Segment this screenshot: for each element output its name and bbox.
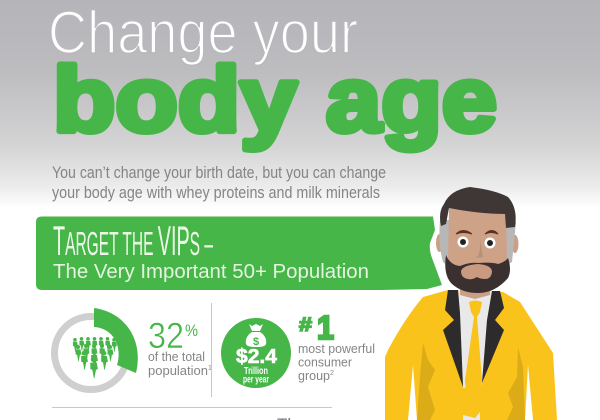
stat: 32% of the total population: % (185, 321, 198, 340)
face (448, 208, 507, 285)
intro text: your body age with whey proteins and milk minerals (52, 184, 380, 202)
vertical divider (210, 303, 212, 397)
title: body age: age (326, 49, 497, 151)
jacket shading (417, 343, 525, 420)
banner: Target the VIPs (36, 216, 442, 290)
money badge: $2.4 Trillion per year (221, 318, 291, 388)
intro text: You can’t change your birth date, but you can change (52, 164, 386, 182)
hair (440, 187, 516, 228)
character: man in yellow suit (385, 187, 557, 420)
ears (436, 234, 443, 252)
banner subheading: The Very Important 50+ Population (53, 261, 369, 283)
eyes (458, 236, 468, 248)
money badge: $2.4 Trillion per year: $2.4 (236, 346, 278, 368)
stat: 32% of the total population: population (148, 363, 208, 378)
donut chart: 32% (54, 308, 138, 390)
beard (445, 255, 510, 293)
stat: #1 most powerful consumer group: # (299, 315, 313, 336)
tie (465, 300, 482, 418)
mouth area (461, 264, 492, 279)
jacket (385, 290, 557, 420)
stat: #1 most powerful consumer group: consumer (298, 356, 352, 370)
icon: money bag: $ (253, 336, 259, 348)
eyebrows (456, 230, 498, 234)
stat: #1 most powerful consumer group: 2 (330, 370, 334, 377)
header background (0, 0, 600, 208)
nose shadow (475, 240, 483, 258)
banner heading: TARGET THE VIPS – (53, 217, 213, 264)
stat: #1 most powerful consumer group: group (298, 369, 330, 383)
lapels (443, 290, 504, 387)
stat: 32% of the total population: 32 (148, 315, 184, 356)
money badge: $2.4 Trillion per year: Trillion (244, 366, 268, 377)
intro text (52, 164, 386, 202)
title: body age (53, 49, 497, 151)
shirt (458, 290, 492, 388)
horizontal divider (52, 406, 332, 408)
money badge: $2.4 Trillion per year: per year (243, 374, 269, 386)
grey side hair (439, 220, 516, 268)
stat: #1 most powerful consumer group: 1 (317, 309, 334, 346)
stat: #1 most powerful consumer group (298, 309, 375, 383)
stat: 32% of the total population: of the total (148, 349, 205, 364)
icon: crowd of people (73, 337, 117, 378)
title: body age: body (53, 49, 297, 151)
stat: 32% of the total population: 1 (208, 365, 212, 372)
neck (460, 280, 490, 299)
stat: #1 most powerful consumer group: most powerful (298, 342, 375, 356)
stat: 32% of the total population (148, 315, 212, 378)
title: Change your: Change your (48, 0, 358, 66)
